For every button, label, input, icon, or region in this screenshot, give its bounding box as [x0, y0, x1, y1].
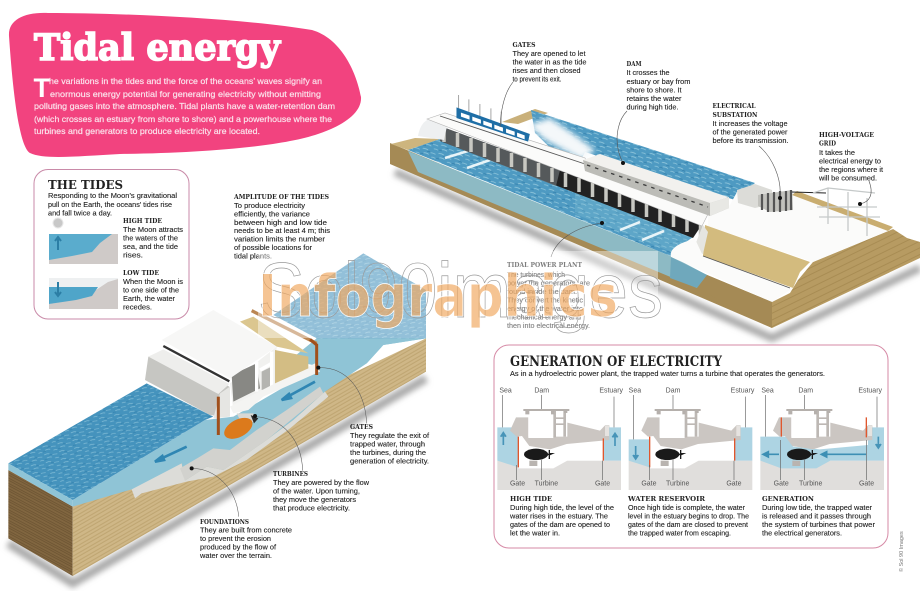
white flow arrows [445, 151, 664, 240]
callout: tidal power plant: found inside the dam. [507, 287, 577, 296]
callout: tidal power plant: mechanical energy and [507, 312, 581, 322]
callout: tidal power plant: power the generators, are [507, 278, 590, 288]
callout: gates (top) [512, 41, 586, 84]
callout: amplitude of the tides: To produce electricity [234, 201, 305, 210]
callout: electrical substation: ELECTRICAL [712, 102, 756, 110]
dam deck [427, 113, 708, 226]
diagram: high tide: Estuary [599, 388, 624, 395]
text: high tide: water rises in the estuary. The [509, 512, 608, 520]
credit: © Sol 90 Images [898, 531, 905, 572]
text: water reservoir: the trapped water from escaping. [628, 528, 731, 538]
diagram: generation: Sea [761, 388, 774, 395]
dam end cap [418, 119, 447, 140]
diagram: low tide [49, 278, 118, 309]
diagram: high tide: Gate [510, 480, 525, 487]
generation heading: GENERATION OF ELECTRICITY [510, 354, 722, 370]
callout: turbines: TURBINES [273, 470, 308, 478]
callout: high-voltage grid [818, 131, 884, 182]
low tide text: When the Moon is [123, 277, 183, 286]
high tide text: HIGH TIDE [123, 217, 162, 225]
left face [8, 470, 73, 576]
intro text: turbines and generators to produce electricity are located. [34, 126, 260, 136]
callout: gates (top): rises and then closed [512, 66, 580, 75]
diagram: water reservoir: Sea [629, 388, 641, 395]
callout: gates (bottom): GATES [350, 423, 373, 431]
callout: dam: DAM [626, 60, 642, 68]
intro text: (which crosses an estuary from shore to shore) and a powerhouse where the [34, 114, 332, 124]
high tide text: sea, and the tide [123, 242, 178, 251]
callout: amplitude of the tides: of possible locations for [234, 243, 312, 252]
diagram: generation: Dam [798, 388, 813, 395]
callout: gates (top): They are opened to let [512, 49, 586, 58]
callout: amplitude of the tides: efficiently, the variance [234, 210, 310, 218]
turbine [218, 397, 258, 443]
callout: amplitude of the tides: AMPLITUDE OF THE TIDES [233, 193, 329, 201]
diagram: generation: Turbine [799, 480, 823, 487]
intro text: enormous energy potential for generating electricity without emitting [50, 89, 321, 99]
diagram: high tide [497, 388, 624, 490]
substation [737, 184, 826, 212]
callout: high-voltage grid: will be consumed. [818, 174, 877, 182]
sluice openings [440, 126, 703, 238]
callout: turbines [273, 470, 369, 512]
diagram: high tide [49, 234, 118, 264]
intro text: he variations in the tides and the force of the oceans’ waves signify an [49, 76, 322, 86]
text: water reservoir: level in the estuary begins to drop. The [628, 512, 749, 520]
callout: foundations: water over the terrain. [199, 551, 272, 560]
callout: amplitude of the tides [233, 193, 330, 260]
text: generation: is released and it passes through [762, 512, 871, 520]
estuary water [408, 139, 693, 257]
callout: gates (bottom): the turbines, during the [350, 448, 426, 457]
high-voltage grid [813, 188, 880, 236]
callout: high-voltage grid: GRID [819, 140, 836, 148]
callout: amplitude of the tides: variation limits the number [234, 234, 325, 244]
callout: high-voltage grid: HIGH-VOLTAGE [819, 131, 874, 139]
callout: high-voltage grid: It takes the [819, 148, 855, 157]
heading: Tidal energy: Tidal energy [34, 27, 281, 69]
diagram: generation [760, 388, 884, 490]
block front face [390, 143, 772, 328]
callout: dam: estuary or bay from [626, 77, 690, 86]
diagram: generation: Gate [774, 480, 789, 487]
low tide text: LOW TIDE [123, 269, 159, 277]
back water [273, 253, 426, 338]
callout: foundations: They are built from concrete [200, 526, 292, 534]
diagram: high tide: Dam [534, 388, 549, 395]
water cross-section [408, 151, 707, 288]
back sand band [792, 191, 893, 231]
text: water reservoir: Once high tide is complete, the water [628, 503, 745, 512]
high tide text: rises. [123, 250, 143, 260]
callout: dam: during high tide. [626, 102, 678, 112]
illustration: tidal power plant overview [390, 82, 920, 338]
text: generation: During low tide, the trapped water [762, 503, 872, 512]
callout: foundations: FOUNDATIONS [200, 518, 249, 526]
callout: amplitude of the tides: between high and low tide [234, 218, 327, 227]
callout: turbines: They are powered by the flow [273, 478, 369, 487]
right face [73, 338, 426, 576]
text: high tide: gates of the dam are opened to [510, 520, 610, 529]
high tide text: the waters of the [123, 234, 178, 242]
text: water reservoir: gates of the dam are closed to prevent [628, 520, 749, 529]
white lower dam deck [230, 363, 320, 413]
back beach [502, 109, 548, 124]
callout: dam: It crosses the [626, 68, 670, 77]
left beach [391, 138, 440, 150]
text: high tide: During high tide, the level of the [510, 503, 614, 512]
callout: gates (top): to prevent its exit. [512, 74, 562, 84]
callout: tidal power plant: energy of the water into [507, 304, 583, 313]
callout: tidal power plant: then into electrical energy. [507, 321, 590, 330]
low tide text: Earth, the water [123, 294, 175, 303]
generation subtitle: As in a hydroelectric power plant, the trapped water turns a turbine that operates the generators. [510, 369, 825, 378]
callout: gates (bottom): trapped water, through [350, 440, 425, 448]
diagram: high tide: Sea [499, 388, 512, 395]
section corner teal [670, 257, 707, 288]
diagram: generation: Gate [859, 480, 874, 487]
callout: electrical substation: of the generated power [712, 128, 788, 136]
sea surface [8, 383, 213, 500]
diagram: water reservoir: Gate [641, 480, 657, 487]
callout: electrical substation [712, 102, 788, 145]
title panel [9, 13, 361, 157]
tides intro [48, 191, 177, 218]
paler water block [575, 184, 693, 252]
blue gates [456, 95, 530, 142]
dam pillars [444, 128, 700, 237]
water section [73, 338, 426, 507]
callout: turbines: of the water. Upon turning, [273, 486, 360, 496]
blue flow arrows [155, 382, 315, 462]
callout: electrical substation: It increases the voltage [712, 119, 788, 128]
diagram: water reservoir [629, 388, 755, 490]
callout: tidal power plant: TIDAL POWER PLANT [507, 261, 582, 269]
dam front block [145, 351, 229, 417]
callout: amplitude of the tides: tidal plants. [234, 252, 272, 260]
callout: gates (top): the water in as the tide [512, 58, 586, 66]
callout: tidal power plant: They convert the kinetic [507, 296, 583, 304]
callout: tidal power plant [507, 261, 590, 330]
land top [708, 190, 893, 262]
text: generation: the system of turbines that power [762, 520, 875, 529]
callout: amplitude of the tides: needs to be at least 4 m; this [234, 226, 330, 235]
callout: dam: retains the water [626, 94, 682, 103]
panel: the tides [34, 170, 189, 319]
callout: electrical substation: before its transmission. [712, 136, 788, 145]
tides intro: pull on the Earth, the oceans’ tides rise [48, 200, 172, 209]
powerhouse building [583, 154, 729, 216]
text: generation: the electrical generators. [762, 528, 842, 538]
gate wall [693, 225, 708, 254]
dam interior [230, 347, 277, 410]
callout leaders [192, 368, 367, 517]
callout: foundations [199, 518, 292, 560]
callout: gates (bottom) [350, 423, 430, 466]
callout: turbines: they move the generators [273, 495, 356, 504]
diagram: water reservoir: Turbine [666, 480, 690, 487]
diagram: high tide: Gate [595, 480, 610, 487]
foam [528, 118, 595, 160]
watermark: Infographics [258, 262, 618, 330]
callout: high-voltage grid: the regions where it [819, 165, 884, 174]
panel: generation of electricity [494, 345, 888, 548]
sand pit [703, 225, 810, 288]
diagram: high tide: Turbine [535, 480, 558, 487]
intro text: polluting gases into the atmosphere. Tidal plants have a water-retention dam [34, 101, 335, 111]
text: high tide: HIGH TIDE [510, 495, 552, 503]
tides intro: Responding to the Moon’s gravitational [48, 191, 177, 200]
callout: foundations: produced by the flow of [200, 542, 277, 552]
callout: tidal power plant: The turbines, which [507, 270, 565, 279]
diagram: water reservoir: Gate [726, 480, 742, 487]
high tide text [123, 217, 183, 260]
high tide text: The Moon attracts [123, 225, 183, 234]
intro text: T [34, 73, 50, 103]
shore road [671, 239, 793, 302]
wooden structure [275, 350, 308, 383]
text: generation: GENERATION [762, 495, 814, 503]
callout: high-voltage grid: electrical energy to [819, 156, 881, 166]
diagram: water reservoir: Dam [666, 388, 681, 395]
callout: gates (bottom): They regulate the exit of [350, 431, 430, 440]
dam roof [162, 310, 277, 378]
intro text [34, 73, 335, 136]
text: generation [762, 495, 875, 538]
callout: electrical substation: SUBSTATION [712, 111, 758, 119]
low tide text [123, 269, 183, 312]
diagram: generation: Estuary [858, 388, 883, 395]
watermark: Sol90images [258, 246, 663, 334]
diagram: water reservoir: Estuary [731, 388, 755, 395]
text: high tide [509, 495, 614, 538]
tides heading: THE TIDES [48, 177, 123, 192]
callout: turbines: that produce electricity. [273, 504, 350, 512]
low tide text: to one side of the [123, 286, 179, 294]
callout: foundations: to prevent the erosion [200, 534, 271, 543]
low tide text: recedes. [123, 302, 152, 312]
callout: dam [626, 60, 690, 112]
callout: dam: shore to shore. It [626, 86, 682, 94]
block right face [772, 229, 920, 328]
text: water reservoir: WATER RESERVOIR [627, 495, 706, 503]
callout leaders [500, 82, 871, 257]
text: water reservoir [627, 495, 749, 538]
icon: moon [53, 218, 63, 228]
foundation [132, 392, 328, 498]
text: high tide: let the water in. [510, 528, 560, 538]
callout: gates (top): GATES [512, 41, 536, 49]
tides intro: and fall twice a day. [48, 208, 112, 218]
callout: gates (bottom): generation of electricity. [350, 456, 429, 466]
illustration: dam cross-section [8, 253, 426, 583]
sea water [531, 110, 755, 200]
